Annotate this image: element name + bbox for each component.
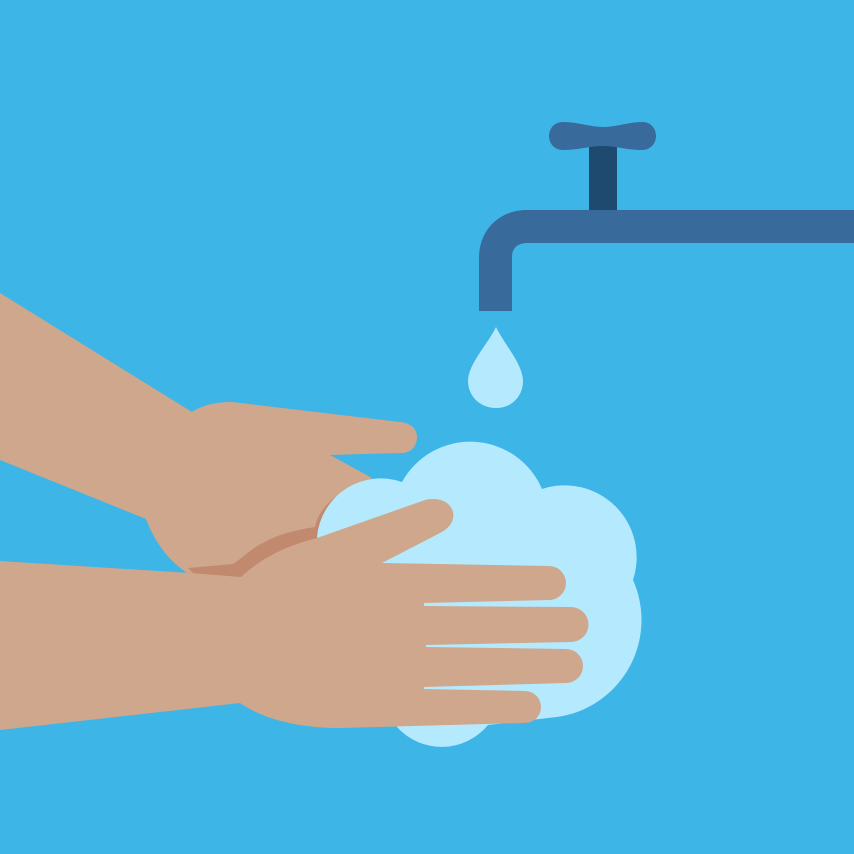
back hand and arm	[0, 293, 417, 578]
icon: water drop	[468, 327, 523, 408]
icon: faucet pipe	[479, 210, 854, 311]
soap foam	[317, 442, 642, 747]
back hand shadow	[188, 496, 345, 578]
icon: tap handle	[549, 122, 656, 150]
front hand and arm	[0, 499, 588, 730]
icon: tap handle stem	[589, 140, 617, 212]
